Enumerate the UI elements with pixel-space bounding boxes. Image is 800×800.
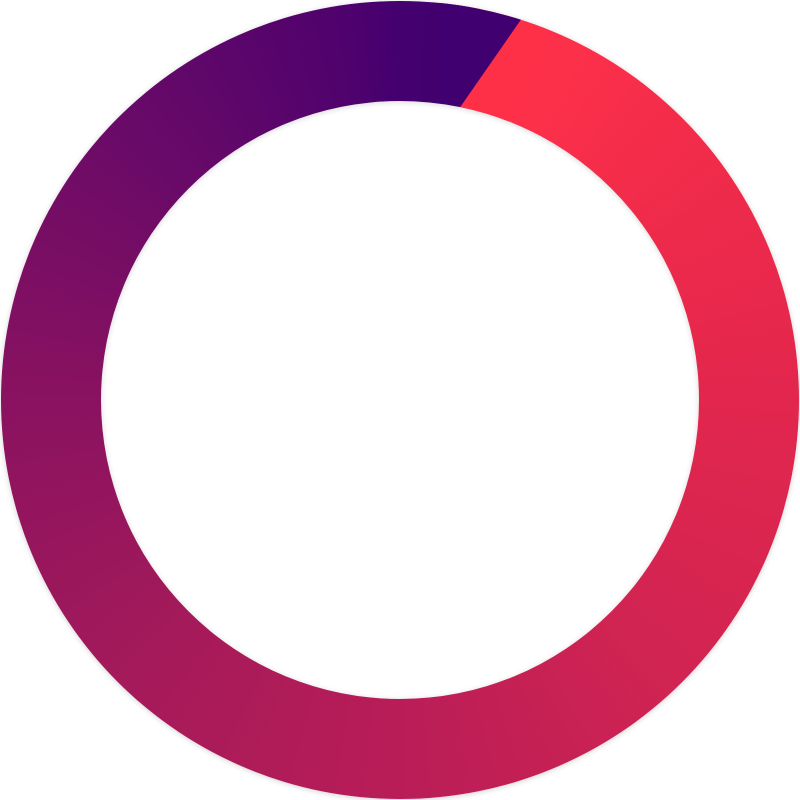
seam wedge: purple end of the ring — [440, 3, 521, 108]
centre hole — [101, 101, 699, 699]
